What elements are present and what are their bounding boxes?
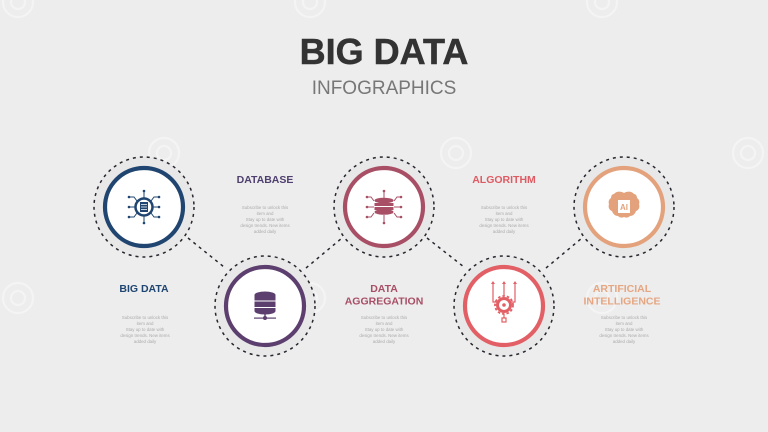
heading: database: DATABASE (237, 174, 293, 186)
icon: data aggregation (366, 190, 402, 224)
text: database description: Subscribe to unlock this (242, 205, 289, 210)
node: artificial intelligence (574, 157, 674, 257)
text: big data description: added daily (134, 339, 157, 344)
node: big data (94, 157, 194, 257)
heading: data aggregation: DATA (370, 283, 398, 295)
icon: database server (254, 292, 276, 320)
heading: algorithm: ALGORITHM (472, 174, 536, 186)
subtitle: INFOGRAPHICS (312, 78, 456, 99)
icon: algorithm gear (491, 281, 517, 322)
text: data aggregation description: Subscribe to unlock this (361, 315, 408, 320)
node: algorithm (454, 256, 554, 356)
text: big data description: item and (137, 321, 154, 326)
icon: AI brain: AI (620, 203, 628, 212)
node: data aggregation (334, 157, 434, 257)
text: data aggregation description: item and (376, 321, 393, 326)
text: algorithm description: design trends. New items (479, 223, 529, 228)
connector: algorithm to artificial intelligence (546, 238, 582, 268)
text: artificial intelligence description: Subscribe to unlock this (601, 315, 648, 320)
text: algorithm description: item and (496, 211, 513, 216)
text: algorithm description: added daily (493, 229, 516, 234)
heading: artificial intelligence: INTELLIGENCE (583, 296, 661, 308)
text: data aggregation description: added daily (373, 339, 396, 344)
text: artificial intelligence description: Stay up to date with (605, 327, 644, 332)
text: algorithm description: Subscribe to unlock this (481, 205, 528, 210)
text: database description: Stay up to date with (246, 217, 285, 222)
text: data aggregation description: design trends. New items (359, 333, 409, 338)
text: big data description: Stay up to date with (126, 327, 165, 332)
connector: big data to database (188, 238, 224, 267)
heading: data aggregation: AGGREGATION (345, 296, 423, 308)
heading: big data: BIG DATA (119, 283, 169, 295)
text: artificial intelligence description: item and (616, 321, 633, 326)
node: database (215, 256, 315, 356)
text: big data description: Subscribe to unlock this (122, 315, 169, 320)
text: artificial intelligence description: design trends. New items (599, 333, 649, 338)
text: database description: design trends. New items (240, 223, 290, 228)
text: database description: item and (257, 211, 274, 216)
icon: big data hub (128, 190, 160, 224)
text: artificial intelligence description: added daily (613, 339, 636, 344)
connector: database to data aggregation (306, 238, 342, 268)
heading: artificial intelligence: ARTIFICIAL (593, 283, 652, 295)
text: database description: added daily (254, 229, 277, 234)
text: data aggregation description: Stay up to date with (365, 327, 404, 332)
text: big data description: design trends. New items (120, 333, 170, 338)
connector: data aggregation to algorithm (427, 238, 464, 267)
title: BIG DATA (300, 31, 468, 72)
text: algorithm description: Stay up to date with (485, 217, 524, 222)
